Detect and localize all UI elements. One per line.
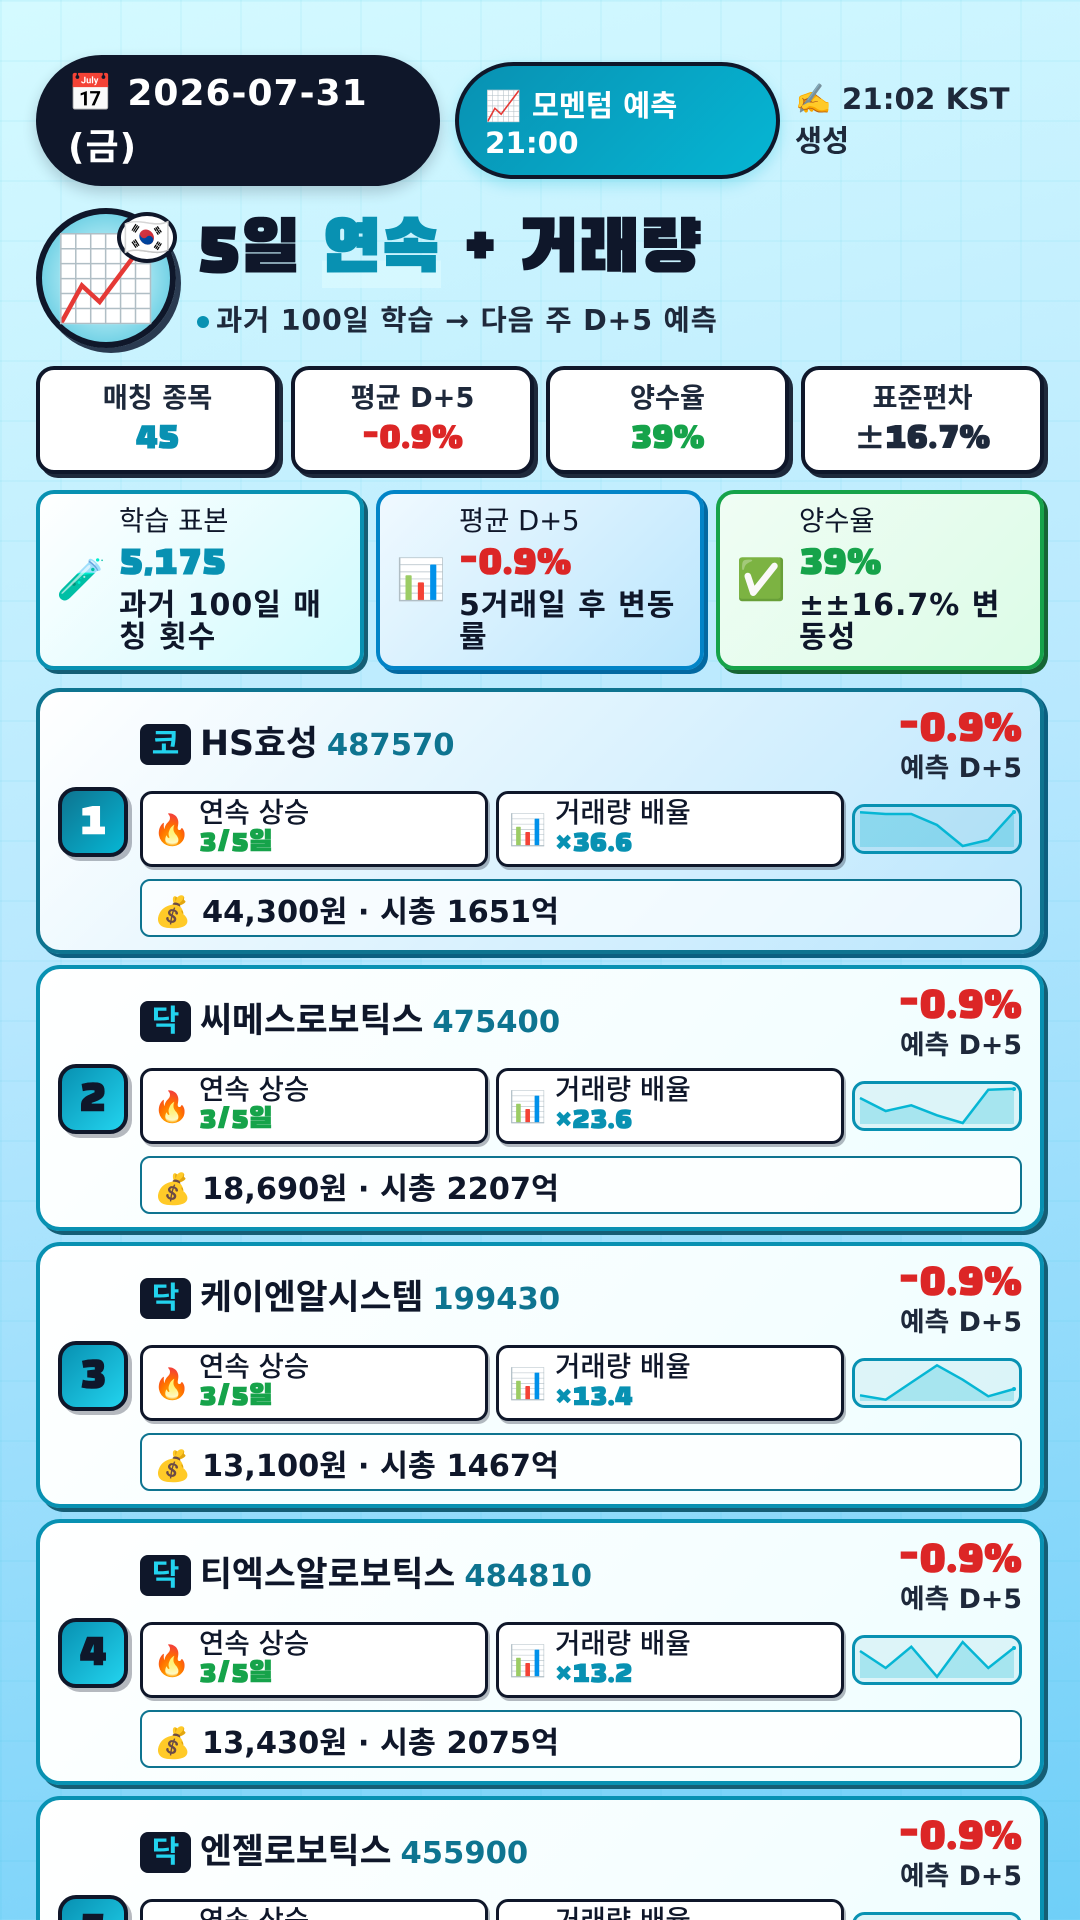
stock name: 엔젤로보틱스 455900 (200, 1832, 528, 1872)
session pill (455, 62, 780, 179)
predicted change: -0.9% (898, 1538, 1022, 1582)
metric: streak (140, 1345, 488, 1421)
hero icon (36, 208, 181, 353)
price row (140, 1710, 1022, 1768)
stat card: win rate (546, 366, 789, 474)
rank (58, 1618, 128, 1688)
stock card 4 (36, 1519, 1044, 1785)
stock card 2 (36, 965, 1044, 1231)
stat card: std dev (801, 366, 1044, 474)
sparkline (852, 1358, 1022, 1408)
market badge: 닥 (152, 1558, 179, 1593)
sparkline (852, 1081, 1022, 1131)
market badge: 닥 (152, 1004, 179, 1039)
info card: average: 📊 (396, 557, 446, 603)
metric: volume: 거래량 배율 (555, 796, 691, 829)
metric: streak (140, 791, 488, 867)
info card: win rate (716, 490, 1044, 670)
rank (58, 787, 128, 857)
metric: volume (496, 1622, 844, 1698)
rank: 2 (80, 1077, 106, 1121)
stock name: 케이엔알시스템 199430 (200, 1278, 560, 1318)
prediction label: 예측 D+5 (900, 753, 1022, 784)
stock card 3 (36, 1242, 1044, 1508)
metric: volume: 📊 (509, 1644, 546, 1679)
metric: streak: 🔥 (153, 813, 190, 848)
prediction label: 예측 D+5 (900, 1307, 1022, 1338)
stat card: win rate: 39% (630, 420, 705, 456)
price row: 💰 (154, 895, 191, 930)
rank (58, 1895, 128, 1920)
market badge (140, 1555, 191, 1596)
date pill: 📅 2026-07-31 (금) (68, 73, 368, 168)
metric: volume: 거래량 배율 (555, 1073, 691, 1106)
metric: volume: 📊 (509, 813, 546, 848)
title: 5일 연속 + 거래량 (197, 216, 700, 288)
rank: 4 (80, 1631, 106, 1675)
price row: 💰 (154, 1172, 191, 1207)
info card: sample: 5,175 (119, 543, 226, 583)
session pill: 📈 모멘텀 예측 21:00 (485, 89, 677, 160)
predicted change: -0.9% (898, 984, 1022, 1028)
metric: volume: 거래량 배율 (555, 1350, 691, 1383)
metric: volume: ×13.4 (555, 1383, 632, 1412)
metric: streak: 🔥 (153, 1644, 190, 1679)
metric: volume: 📊 (509, 1367, 546, 1402)
market badge (140, 724, 191, 765)
market badge (140, 1832, 191, 1873)
metric: streak: 🔥 (153, 1090, 190, 1125)
sparkline (852, 804, 1022, 854)
metric: streak (140, 1899, 488, 1920)
market badge: 코 (152, 727, 179, 762)
metric: streak: 연속 상승 (199, 796, 309, 829)
metric: volume: 거래량 배율 (555, 1627, 691, 1660)
metric: streak: 연속 상승 (199, 1627, 309, 1660)
stat card: std dev: 표준편차 (872, 383, 973, 414)
stat card: average (291, 366, 534, 474)
price row: 18,690원 · 시총 2207억 (202, 1172, 559, 1207)
metric: streak: 3/5일 (199, 1660, 273, 1689)
stock name: HS효성 487570 (200, 724, 455, 764)
market badge (140, 1278, 191, 1319)
sparkline (852, 1912, 1022, 1920)
stock card 5 (36, 1796, 1044, 1920)
market badge: 닥 (152, 1835, 179, 1870)
icon: chart circle: 📈 (54, 230, 158, 327)
metric: volume (496, 1345, 844, 1421)
price row: 13,100원 · 시총 1467억 (202, 1449, 559, 1484)
metric: volume (496, 1899, 844, 1920)
icon: chart circle (36, 208, 176, 348)
price row: 💰 (154, 1726, 191, 1761)
info card: sample: 과거 100일 매칭 횟수 (119, 588, 322, 655)
stat card: average: 평균 D+5 (351, 383, 474, 414)
predicted change: -0.9% (898, 707, 1022, 751)
metric: streak: 3/5일 (199, 1106, 273, 1135)
price row (140, 879, 1022, 937)
price row: 44,300원 · 시총 1651억 (202, 895, 559, 930)
prediction label: 예측 D+5 (900, 1584, 1022, 1615)
info card: average: 평균 D+5 (459, 506, 580, 537)
icon: korean flag (117, 212, 177, 263)
subtitle: 과거 100일 학습 → 다음 주 D+5 예측 (216, 304, 718, 337)
price row (140, 1433, 1022, 1491)
metric: streak (140, 1622, 488, 1698)
metric: volume (496, 1068, 844, 1144)
metric: streak (140, 1068, 488, 1144)
stat card: matches: 매칭 종목 (103, 383, 212, 414)
generated time: ✍️ 21:02 KST 생성 (795, 82, 1010, 158)
stat card: average: -0.9% (362, 420, 463, 456)
metric: volume: 📊 (509, 1090, 546, 1125)
metric: volume: ×23.6 (555, 1106, 632, 1135)
metric: streak: 3/5일 (199, 1383, 273, 1412)
metric: volume: ×13.2 (555, 1660, 632, 1689)
stat card: matches (36, 366, 279, 474)
metric: streak: 연속 상승 (199, 1350, 309, 1383)
info card: average: 5거래일 후 변동률 (459, 588, 675, 655)
market badge (140, 1001, 191, 1042)
metric: volume: ×36.6 (555, 829, 632, 858)
stock name: 티엑스알로보틱스 484810 (200, 1555, 592, 1595)
info card: sample: 🧪 (56, 557, 106, 603)
date pill (36, 55, 440, 186)
info card: win rate: 39% (799, 543, 881, 583)
metric: streak: 연속 상승 (199, 1073, 309, 1106)
price row: 13,430원 · 시총 2075억 (202, 1726, 559, 1761)
metric: volume (496, 791, 844, 867)
rank (58, 1064, 128, 1134)
rank (58, 1341, 128, 1411)
metric: streak: 🔥 (153, 1367, 190, 1402)
stock name: 씨메스로보틱스 475400 (200, 1001, 560, 1041)
metric: streak: 3/5일 (199, 829, 273, 858)
predicted change: -0.9% (898, 1815, 1022, 1859)
sparkline (852, 1635, 1022, 1685)
info card: average (376, 490, 704, 670)
predicted change: -0.9% (898, 1261, 1022, 1305)
stat card: win rate: 양수율 (630, 383, 705, 414)
info card: win rate: ±±16.7% 변동성 (799, 588, 1000, 655)
prediction label: 예측 D+5 (900, 1861, 1022, 1892)
prediction label: 예측 D+5 (900, 1030, 1022, 1061)
info card: win rate: ✅ (736, 557, 786, 603)
info card: sample (36, 490, 364, 670)
info card: average: -0.9% (459, 543, 571, 583)
market badge: 닥 (152, 1281, 179, 1316)
rank: 1 (80, 800, 106, 844)
price row: 💰 (154, 1449, 191, 1484)
rank: 3 (80, 1354, 106, 1398)
info card: win rate: 양수율 (799, 506, 875, 537)
stock card 1 (36, 688, 1044, 954)
stat card: matches: 45 (136, 420, 179, 456)
icon: korean flag: 🇰🇷 (123, 215, 171, 259)
info card: sample: 학습 표본 (119, 506, 229, 537)
price row (140, 1156, 1022, 1214)
stat card: std dev: ±16.7% (855, 420, 990, 456)
